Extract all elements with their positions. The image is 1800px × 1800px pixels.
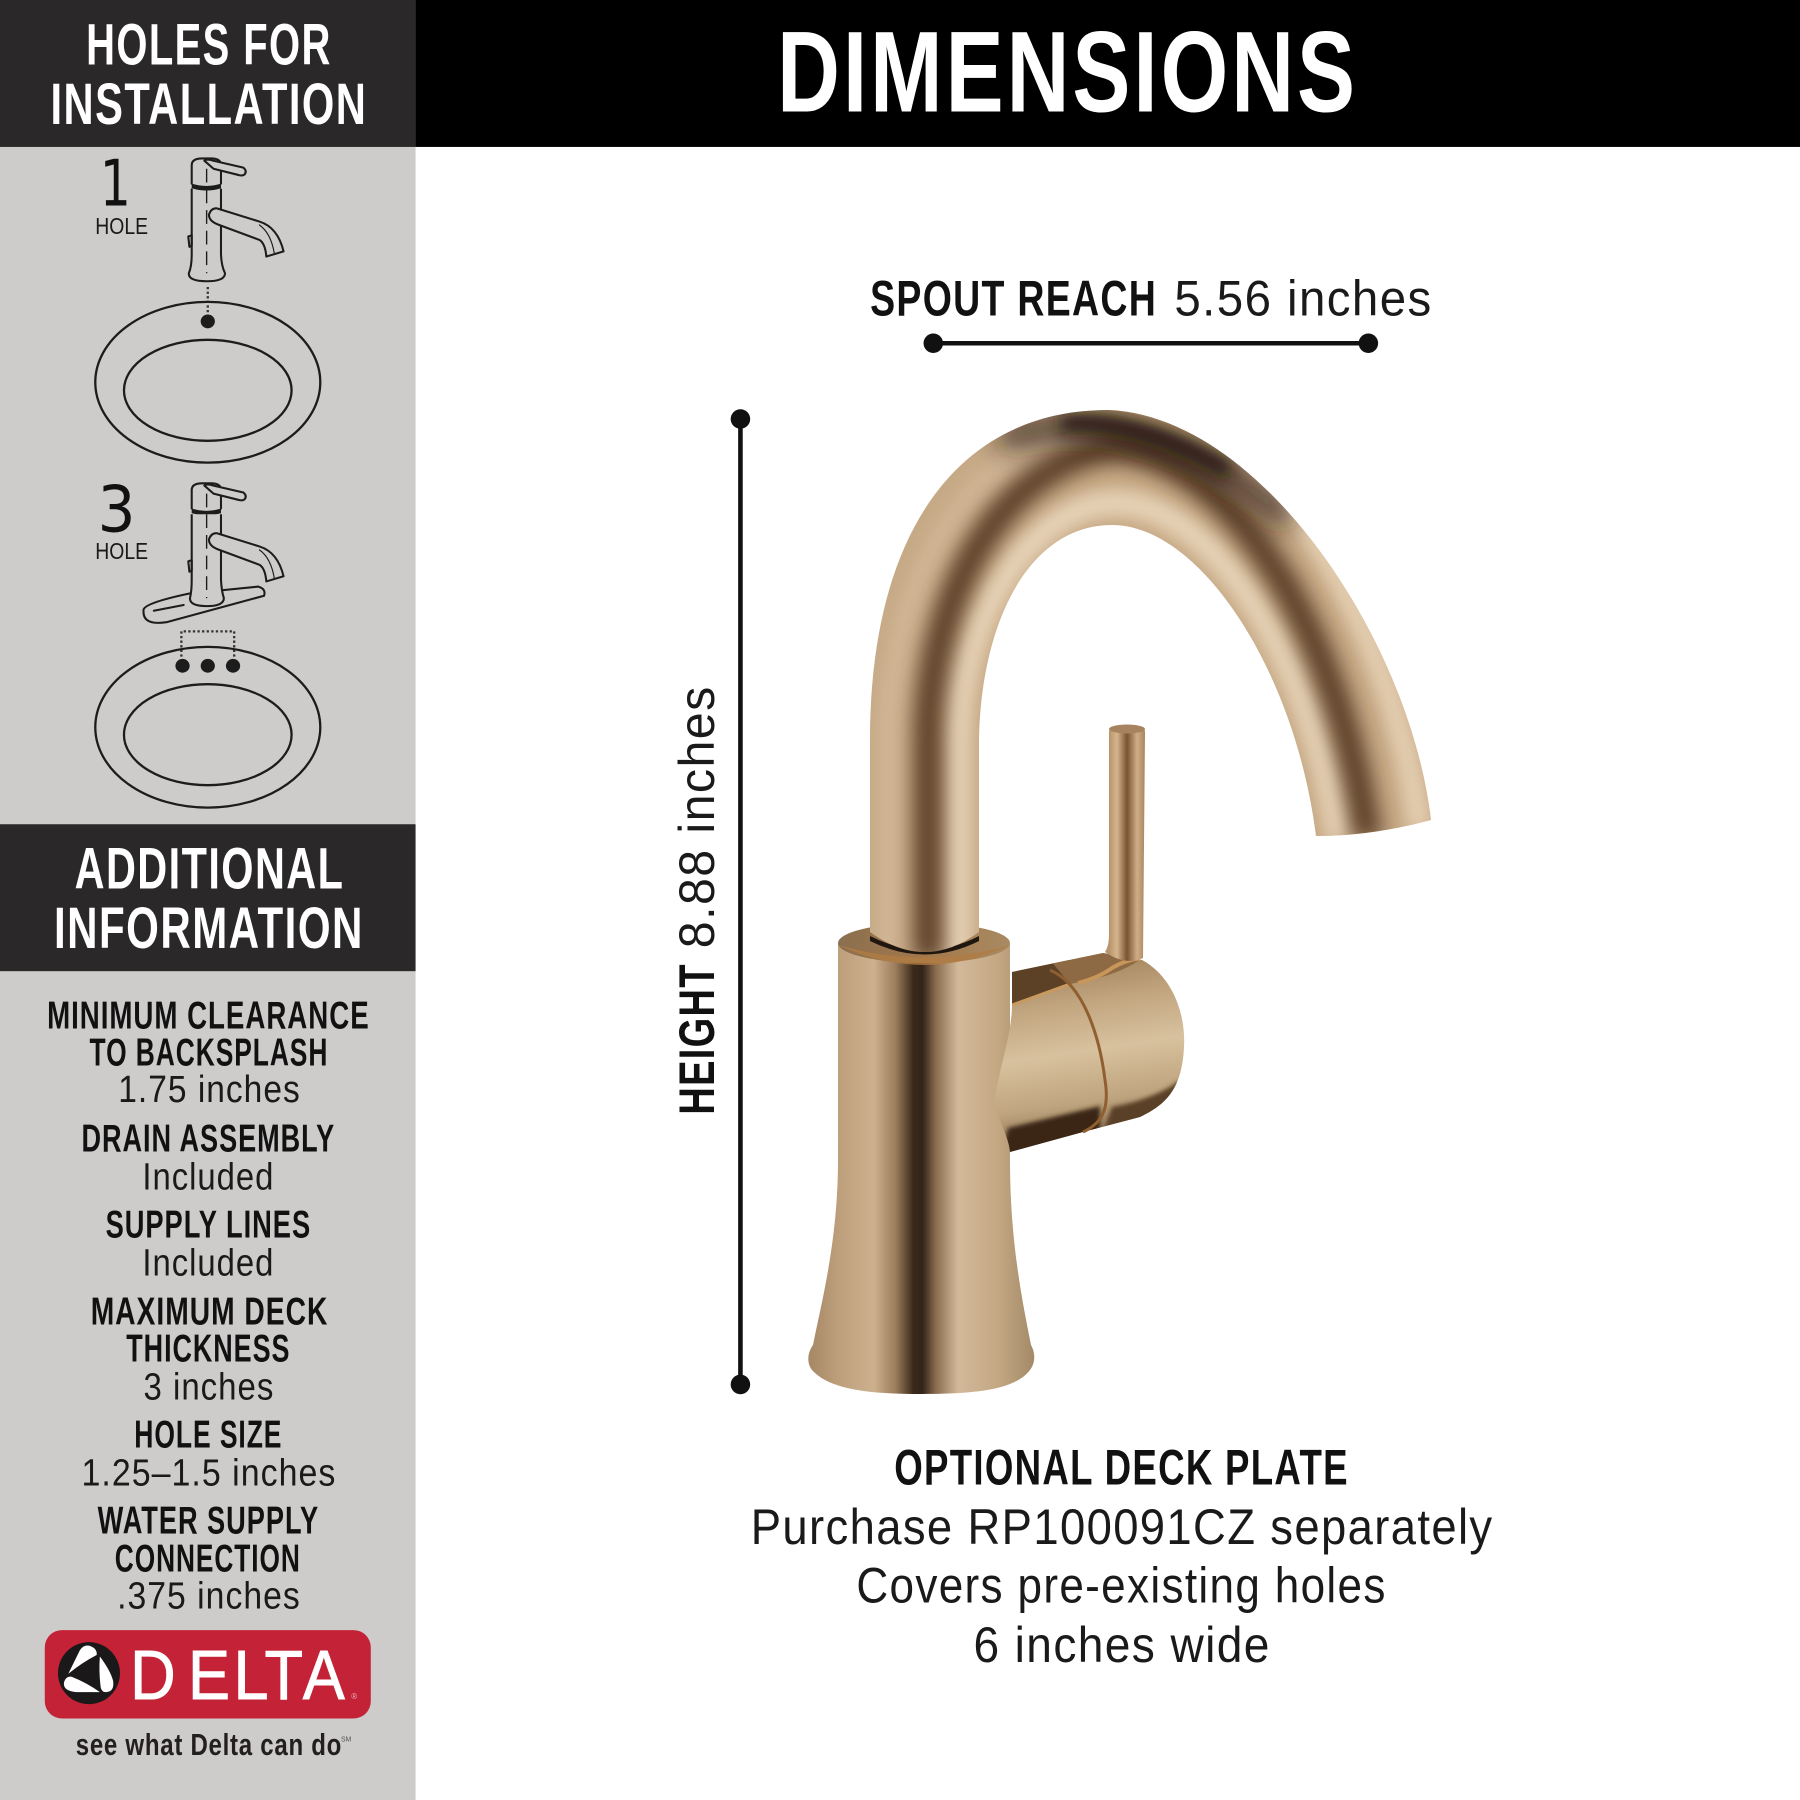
- heading band: additional information: ADDITIONAL: [75, 837, 344, 902]
- spec: supply lines: Included: [142, 1242, 274, 1284]
- tagline: see what Delta can do: SM: [341, 1736, 352, 1743]
- arrow: spout reach dimension line: [924, 333, 1378, 353]
- label: spout reach: [870, 270, 1433, 327]
- callout: optional deck plate: Covers pre-existing holes: [856, 1557, 1387, 1614]
- spec: drain assembly: [82, 1117, 335, 1198]
- diagram: 1 hole installation: [95, 146, 320, 463]
- spec: minimum clearance: TO BACKSPLASH: [90, 1031, 328, 1074]
- logo: delta: [45, 1630, 371, 1718]
- diagram: 1 hole installation: HOLE: [95, 213, 148, 239]
- handle seam: [1050, 970, 1106, 1132]
- spec: water supply connection: .375 inches: [117, 1575, 301, 1617]
- heading band: holes for installation: INSTALLATION: [51, 72, 367, 137]
- label: spout reach: SPOUT REACH: [870, 270, 1157, 327]
- spec: water supply connection: CONNECTION: [115, 1538, 301, 1581]
- logo: delta: DELTA: [130, 1637, 345, 1715]
- diagram: 3 hole installation: 3: [98, 473, 135, 548]
- arrow: height dimension line: [731, 409, 750, 1394]
- lever: [1105, 725, 1145, 961]
- callout: optional deck plate: [751, 1438, 1493, 1673]
- handle barrel: [996, 953, 1184, 1152]
- spec: drain assembly: Included: [142, 1156, 274, 1198]
- spec: maximum deck thickness: THICKNESS: [126, 1327, 290, 1370]
- tagline: see what Delta can do: see what Delta can do: [76, 1727, 342, 1762]
- callout: optional deck plate: Purchase RP100091CZ separately: [751, 1498, 1493, 1555]
- heading band: additional information: [0, 824, 416, 971]
- spec: drain assembly: DRAIN ASSEMBLY: [82, 1117, 335, 1160]
- spec: water supply connection: WATER SUPPLY: [98, 1500, 319, 1543]
- title band: dimensions: [416, 0, 1800, 147]
- spec: minimum clearance: 1.75 inches: [118, 1069, 301, 1111]
- panel: left sidebar: [0, 0, 416, 1800]
- label: height: HEIGHT: [668, 963, 725, 1115]
- spec: hole size: HOLE SIZE: [134, 1414, 282, 1457]
- spec: minimum clearance: MINIMUM CLEARANCE: [47, 995, 370, 1038]
- spec: maximum deck thickness: [91, 1291, 328, 1408]
- label: height: 8.88 inches: [668, 685, 725, 948]
- spec: supply lines: [106, 1204, 311, 1284]
- logo: delta: ®: [351, 1692, 357, 1701]
- callout: optional deck plate: 6 inches wide: [973, 1616, 1271, 1673]
- column body: [808, 944, 1034, 1394]
- callout: optional deck plate: OPTIONAL DECK PLATE: [894, 1438, 1349, 1495]
- label: height: [668, 685, 725, 1115]
- spec list: [47, 995, 370, 1617]
- label: spout reach: 5.56 inches: [1174, 270, 1433, 327]
- product image: faucet: [808, 400, 1450, 1394]
- diagram: 1 hole installation: 1: [100, 146, 131, 221]
- spout: [860, 400, 1450, 970]
- spec: supply lines: SUPPLY LINES: [106, 1203, 311, 1246]
- spec: hole size: [82, 1414, 336, 1494]
- column top rim: [838, 923, 1010, 965]
- spec: hole size: 1.25–1.5 inches: [82, 1452, 336, 1494]
- diagram: 3 hole installation: [95, 473, 320, 808]
- spec: minimum clearance: [47, 995, 370, 1111]
- spec: water supply connection: [98, 1500, 319, 1617]
- spec: maximum deck thickness: 3 inches: [143, 1366, 274, 1408]
- spec: maximum deck thickness: MAXIMUM DECK: [91, 1291, 328, 1334]
- heading band: additional information: INFORMATION: [54, 896, 364, 961]
- title band: dimensions: DIMENSIONS: [777, 8, 1358, 136]
- diagram: 3 hole installation: HOLE: [95, 538, 148, 564]
- heading band: holes for installation: HOLES FOR: [86, 12, 332, 77]
- heading band: holes for installation: [0, 0, 416, 147]
